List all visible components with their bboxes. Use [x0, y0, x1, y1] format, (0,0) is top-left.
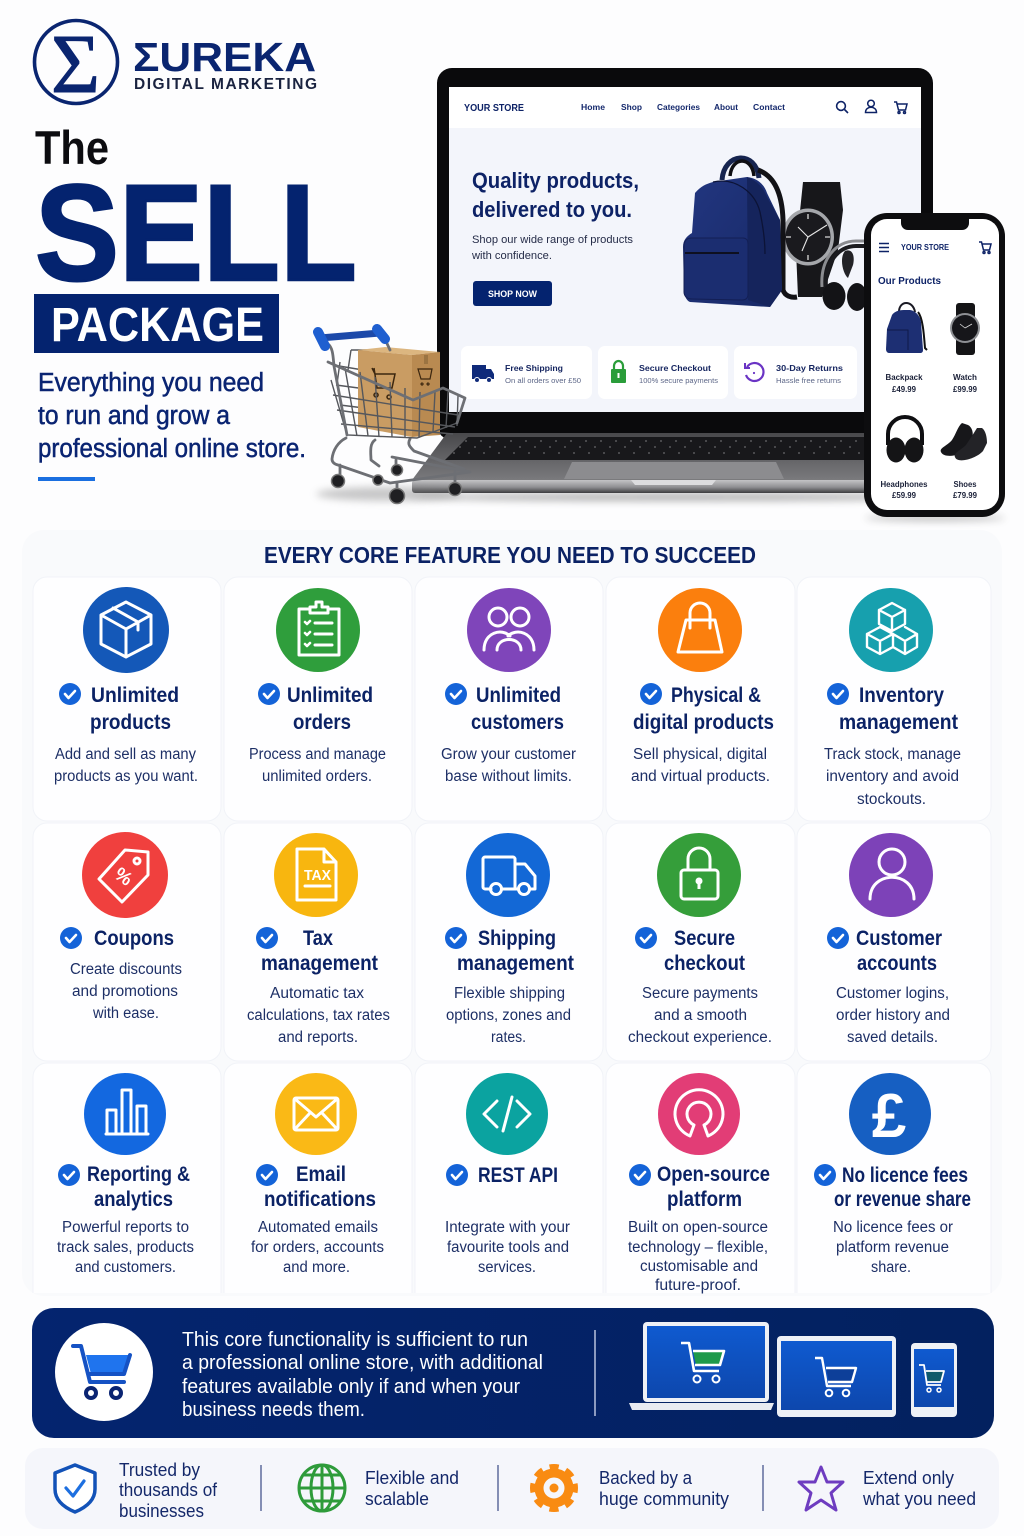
card: reporting and analytics — [33, 1063, 221, 1293]
phone product: backpack — [886, 303, 927, 394]
hero text — [471, 234, 633, 262]
icon: open source — [658, 1073, 740, 1155]
hero text: with confidence. — [471, 250, 552, 262]
title: No licence fees — [842, 1164, 968, 1187]
laptop lid — [437, 68, 933, 440]
phone product: headphones — [880, 417, 928, 500]
laptop mockup — [410, 68, 950, 501]
title — [664, 927, 745, 975]
feature: secure checkout: Secure Checkout — [639, 363, 711, 373]
store nav: Shop — [621, 102, 642, 112]
product: watch — [782, 182, 843, 297]
title — [90, 684, 179, 734]
title — [657, 1163, 770, 1211]
icon: users — [467, 588, 551, 672]
hero headline — [472, 168, 639, 222]
check badge — [446, 1164, 468, 1186]
title: Open-source — [657, 1163, 770, 1186]
icon: tag — [82, 832, 168, 918]
title: management — [457, 952, 574, 975]
description: inventory and avoid — [826, 768, 959, 785]
phone product: shoes: Shoes — [954, 480, 977, 489]
trust text: extend — [862, 1468, 976, 1509]
trust text: flexible: Flexible and — [365, 1468, 459, 1488]
check badge — [629, 1164, 651, 1186]
store website screen — [449, 87, 921, 412]
callout text: This core functionality is sufficient to run — [182, 1328, 528, 1351]
title: management — [261, 952, 378, 975]
title: Unlimited — [287, 684, 373, 707]
icon: envelope — [275, 1073, 357, 1155]
description: track sales, products — [57, 1239, 194, 1256]
icon: phone cart — [911, 1343, 957, 1417]
description — [628, 985, 772, 1046]
description: future-proof. — [655, 1277, 741, 1294]
check badge — [258, 683, 280, 705]
phone header: YOUR STORE — [901, 243, 950, 252]
description: checkout experience. — [628, 1029, 772, 1046]
store nav: About — [714, 102, 738, 112]
title: Physical & — [671, 684, 761, 707]
description: and promotions — [72, 983, 178, 1000]
phone product: backpack: Backpack — [886, 373, 923, 382]
card: unlimited orders — [224, 577, 412, 821]
trust text: flexible: scalable — [365, 1489, 429, 1509]
trust text: community — [599, 1468, 729, 1509]
phone header — [879, 242, 991, 254]
icon: tag: % — [110, 864, 136, 891]
description: technology – flexible, — [628, 1239, 768, 1256]
card: coupons — [33, 823, 221, 1061]
check badge — [635, 927, 657, 949]
tagline: to run and grow a — [38, 402, 231, 430]
description: share. — [871, 1259, 911, 1276]
description — [631, 746, 770, 785]
card: secure checkout — [606, 823, 795, 1061]
description — [441, 746, 576, 785]
title — [457, 927, 574, 975]
title: Coupons — [94, 927, 174, 950]
title: Email — [296, 1163, 346, 1186]
title — [839, 684, 958, 734]
description: saved details. — [847, 1029, 938, 1046]
description: services. — [478, 1259, 536, 1276]
description — [824, 746, 961, 808]
description: Automated emails — [258, 1219, 378, 1236]
trust text: extend: Extend only — [863, 1468, 954, 1488]
description: favourite tools and — [447, 1239, 569, 1256]
feature: 30-day returns: Hassle free returns — [776, 378, 842, 385]
title — [834, 1164, 971, 1211]
trust text: trusted: businesses — [119, 1501, 204, 1521]
check badge — [640, 683, 662, 705]
phone product: backpack: £49.99 — [892, 385, 917, 394]
icon: laptop cart — [629, 1322, 774, 1410]
description: No licence fees or — [833, 1219, 953, 1236]
title — [633, 684, 774, 734]
callout text: a professional online store, with additional — [182, 1351, 543, 1374]
phone mockup — [864, 213, 1005, 521]
icon: padlock — [657, 833, 741, 917]
description: Add and sell as many — [55, 746, 196, 763]
check badge — [814, 1164, 836, 1186]
description: Built on open-source — [628, 1219, 768, 1236]
description — [247, 985, 390, 1046]
logo sigma mark: Σ — [51, 18, 100, 111]
features heading: EVERY CORE FEATURE YOU NEED TO SUCCEED — [264, 542, 756, 568]
title: PACKAGE badge: PACKAGE — [51, 299, 264, 352]
card: physical and digital products — [606, 577, 795, 821]
description: and reports. — [278, 1029, 358, 1046]
logo strapline: DIGITAL MARKETING — [134, 76, 317, 93]
features strip — [461, 346, 857, 399]
store nav: Contact — [753, 102, 785, 112]
cardboard box — [358, 347, 440, 437]
icon: pound: £ — [872, 1082, 906, 1151]
description: and more. — [283, 1259, 350, 1276]
description: order history and — [836, 1007, 950, 1024]
icon: search — [837, 102, 848, 113]
card: customer accounts — [797, 823, 991, 1061]
description — [446, 985, 571, 1046]
title: SELL: SELL — [35, 157, 357, 310]
card: no licence fees — [797, 1063, 991, 1293]
icon: box — [83, 587, 169, 673]
description — [249, 746, 386, 785]
phone product: watch — [950, 303, 980, 394]
icon: cart in circle — [55, 1323, 153, 1421]
callout text — [182, 1328, 543, 1421]
cart back wires — [333, 350, 376, 408]
feature: free shipping: Free Shipping — [505, 363, 563, 373]
title: or revenue share — [834, 1188, 971, 1211]
icon: bar chart — [84, 1073, 166, 1155]
description: Customer logins, — [836, 985, 949, 1002]
card: shipping management — [415, 823, 603, 1061]
description: platform revenue — [836, 1239, 949, 1256]
title — [856, 927, 942, 975]
tagline accent rule — [38, 477, 95, 481]
card: email notifications — [224, 1063, 412, 1293]
tagline: Everything you need — [38, 369, 264, 397]
title: checkout — [664, 952, 745, 975]
title: Unlimited — [476, 684, 561, 707]
phone product: shoes — [941, 423, 987, 500]
cart lower frame — [332, 438, 470, 491]
description: customisable and — [640, 1258, 758, 1275]
description: Process and manage — [249, 746, 386, 763]
icon: person — [849, 833, 933, 917]
description: Integrate with your — [445, 1219, 570, 1236]
icon: gear — [533, 1467, 575, 1509]
check badge — [58, 1164, 80, 1186]
icon: pound — [849, 1073, 931, 1155]
trust text: extend: what you need — [862, 1489, 976, 1509]
description — [54, 746, 198, 785]
title: Unlimited — [91, 684, 179, 707]
cart wheels — [332, 464, 462, 504]
description: Sell physical, digital — [633, 746, 767, 763]
hero headline: Quality products, — [472, 168, 639, 193]
trust text: trusted — [119, 1460, 218, 1521]
tagline — [38, 369, 306, 463]
description: unlimited orders. — [262, 768, 372, 785]
icon: code — [466, 1073, 548, 1155]
product: headphones — [822, 241, 868, 311]
description: calculations, tax rates — [247, 1007, 390, 1024]
check badge — [59, 683, 81, 705]
description — [836, 985, 950, 1046]
description: Create discounts — [70, 961, 182, 978]
title: customers — [471, 711, 564, 734]
description: with ease. — [92, 1005, 159, 1022]
store nav: Categories — [657, 102, 700, 112]
description: options, zones and — [446, 1007, 571, 1024]
description: products as you want. — [54, 768, 198, 785]
title: Reporting & — [87, 1163, 190, 1186]
feature: 30-day returns — [734, 346, 857, 399]
description: Automatic tax — [270, 985, 364, 1002]
icon: bag — [658, 588, 742, 672]
description: Powerful reports to — [62, 1219, 189, 1236]
card: rest api — [415, 1063, 603, 1293]
description: Secure payments — [642, 985, 758, 1002]
cart basket wires — [331, 362, 465, 438]
shopping cart with box — [316, 329, 470, 504]
phone product: shoes: £79.99 — [953, 491, 978, 500]
title — [261, 927, 378, 975]
check badge — [256, 927, 278, 949]
title: The: The — [35, 121, 109, 174]
description: and customers. — [75, 1259, 176, 1276]
check badge — [827, 927, 849, 949]
card: tax management — [224, 823, 412, 1061]
icon: star — [799, 1467, 843, 1510]
check badge — [256, 1164, 278, 1186]
description — [628, 1219, 768, 1294]
panel: core features — [22, 530, 1002, 1296]
icon: tablet cart — [777, 1336, 896, 1417]
title: digital products — [633, 711, 774, 734]
description: stockouts. — [857, 791, 926, 808]
description: Track stock, manage — [824, 746, 961, 763]
card: unlimited customers — [415, 577, 603, 821]
title — [471, 684, 564, 734]
title: management — [839, 711, 958, 734]
description: rates. — [491, 1029, 526, 1046]
icon: cart — [894, 102, 907, 114]
icon: tax document — [274, 833, 358, 917]
laptop deck and keyboard — [412, 433, 950, 493]
trust text: community: Backed by a — [599, 1468, 693, 1488]
icon: tax document: TAX — [304, 867, 331, 884]
store nav: YOUR STORE — [464, 103, 524, 114]
feature: secure checkout: 100% secure payments — [639, 378, 719, 385]
tagline: professional online store. — [38, 435, 306, 463]
logo wordmark: ΣUREKA — [133, 34, 316, 80]
description: Grow your customer — [441, 746, 576, 763]
feature: free shipping — [461, 346, 592, 399]
title: notifications — [264, 1188, 376, 1211]
title: accounts — [857, 952, 937, 975]
title: products — [90, 711, 171, 734]
title: REST API — [478, 1164, 558, 1187]
icon: clipboard — [276, 588, 360, 672]
icon: shield — [55, 1465, 95, 1512]
product: backpack — [683, 158, 797, 307]
description — [251, 1219, 384, 1276]
phone product: headphones: Headphones — [880, 480, 928, 489]
trust text: community: huge community — [599, 1489, 729, 1509]
icon: globe — [299, 1465, 345, 1511]
callout banner — [32, 1308, 994, 1438]
store nav: Home — [581, 102, 605, 112]
icon: truck — [466, 833, 550, 917]
cart handle — [318, 329, 385, 346]
check badge — [445, 927, 467, 949]
card: unlimited products — [33, 577, 221, 821]
title: orders — [293, 711, 351, 734]
description: Flexible shipping — [454, 985, 565, 1002]
description — [833, 1219, 953, 1276]
description: base without limits. — [445, 768, 572, 785]
description: for orders, accounts — [251, 1239, 384, 1256]
check badge — [445, 683, 467, 705]
title — [287, 684, 373, 734]
phone product: headphones: £59.99 — [892, 491, 917, 500]
callout divider — [594, 1330, 596, 1416]
trust text: trusted: thousands of — [119, 1480, 218, 1500]
shop now button — [473, 281, 552, 306]
phone heading: Our Products — [878, 276, 941, 287]
title: Shipping — [478, 927, 556, 950]
check badge — [827, 683, 849, 705]
logo: Eureka Digital Marketing — [34, 18, 317, 111]
trust text: trusted: Trusted by — [119, 1460, 200, 1480]
title: Customer — [856, 927, 942, 950]
feature: secure checkout — [598, 346, 728, 399]
description: and virtual products. — [631, 768, 770, 785]
shop now button: SHOP NOW — [488, 289, 537, 299]
phone product: watch: £99.99 — [953, 385, 978, 394]
footer trust strip — [25, 1448, 999, 1529]
phone product: watch: Watch — [953, 373, 977, 382]
description: and a smooth — [654, 1007, 747, 1024]
description — [445, 1219, 570, 1276]
callout text: business needs them. — [182, 1398, 365, 1421]
callout text: features available only if and when your — [182, 1375, 520, 1398]
title: platform — [667, 1188, 742, 1211]
feature: free shipping: On all orders over £50 — [505, 378, 581, 385]
cart basket rails — [328, 337, 465, 435]
description — [70, 961, 182, 1022]
title: Tax — [303, 927, 333, 950]
title — [87, 1163, 190, 1211]
hero headline: delivered to you. — [472, 197, 632, 222]
icon: user — [866, 100, 876, 112]
title — [264, 1163, 376, 1211]
title: analytics — [94, 1188, 173, 1211]
trust text: flexible — [365, 1468, 459, 1509]
check badge — [60, 927, 82, 949]
store nav — [464, 102, 785, 114]
feature: 30-day returns: 30-Day Returns — [776, 363, 843, 373]
title: Inventory — [859, 684, 944, 707]
hero text: Shop our wide range of products — [472, 234, 633, 246]
title: Secure — [674, 927, 735, 950]
icon: cubes — [849, 588, 933, 672]
card: inventory management — [797, 577, 991, 821]
description — [57, 1219, 194, 1276]
card: open-source platform — [606, 1063, 795, 1294]
